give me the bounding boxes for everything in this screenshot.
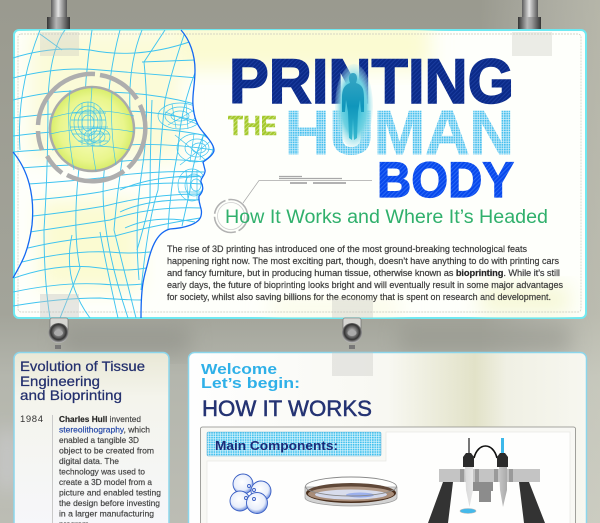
intro paragraph: for society, whilst also saving billions for the economy that is spent on research and development.	[167, 292, 551, 302]
components frame	[200, 427, 576, 523]
icon: cells	[230, 474, 271, 514]
title: The: THE	[228, 110, 277, 141]
timeline entry: Charles Hull invented	[59, 414, 141, 424]
head outline	[13, 30, 214, 318]
hanging pole right	[518, 0, 541, 30]
clamp right	[342, 318, 362, 349]
how it works heading: HOW IT WORKS	[202, 396, 372, 421]
timeline divider	[52, 415, 53, 523]
intro paragraph: happening right now. The most exciting part, though, doesn’t have anything to do with printing cars	[167, 256, 559, 266]
timeline entry: picture and enabled testing	[59, 488, 161, 498]
intro paragraph	[167, 244, 563, 302]
dense face mesh	[158, 103, 213, 201]
hanging pole left	[47, 0, 70, 30]
welcome heading: Welcome	[201, 361, 277, 378]
tape top right	[512, 32, 552, 56]
welcome heading	[201, 361, 300, 392]
timeline heading: Engineering	[20, 374, 100, 389]
timeline entry: enabled a tangible 3D	[59, 435, 139, 445]
head wireframe	[13, 30, 214, 318]
timeline entry: the design before investing	[59, 498, 160, 508]
title: Body: BODY	[377, 152, 514, 208]
tape bottom center	[332, 298, 373, 318]
timeline entry: stereolithography, which	[59, 424, 150, 434]
timeline entry: digital data. The	[59, 456, 119, 466]
clamp left	[48, 318, 68, 349]
main components tab: Main Components:	[215, 438, 338, 453]
panel: evolution timeline	[14, 352, 169, 523]
welcome heading: Let’s begin:	[201, 375, 300, 392]
tape bottom left	[40, 294, 79, 318]
title: Human: HUMAN	[285, 99, 514, 168]
timeline heading: and Bioprinting	[20, 388, 122, 403]
icon: human figure glow	[335, 64, 373, 148]
tape on panel	[332, 352, 373, 376]
timeline entry	[59, 414, 161, 523]
year: 1984	[20, 414, 43, 425]
intro paragraph: The rise of 3D printing has introduced one of the most ground-breaking technological feats	[167, 244, 527, 254]
icon: bioprinter	[428, 438, 545, 523]
brain scan circle	[38, 74, 145, 181]
timeline heading	[20, 359, 145, 403]
intro paragraph: and fancy furniture, but in producing human tissue, otherwise known as bioprinting. While it’s still	[167, 268, 560, 278]
tape top left	[40, 32, 79, 56]
timeline entry: object to be created from	[59, 446, 154, 456]
callout line with ring	[214, 176, 372, 232]
subtitle: How It Works and Where It’s Headed	[225, 207, 548, 228]
main components tab	[207, 432, 381, 456]
title: Printing: PRINTING	[229, 47, 514, 117]
timeline entry: create a 3D model from a	[59, 477, 152, 487]
panel: title banner	[13, 20, 586, 318]
intro paragraph: early days, the future of bioprinting looks bright and will eventually result in some major advantages	[167, 280, 563, 290]
panel: how it works	[188, 352, 586, 523]
timeline entry: technology was used to	[59, 466, 145, 476]
timeline heading: Evolution of Tissue	[20, 359, 145, 374]
icon: petri dish	[305, 477, 397, 506]
timeline entry: in a larger manufacturing	[59, 508, 154, 518]
